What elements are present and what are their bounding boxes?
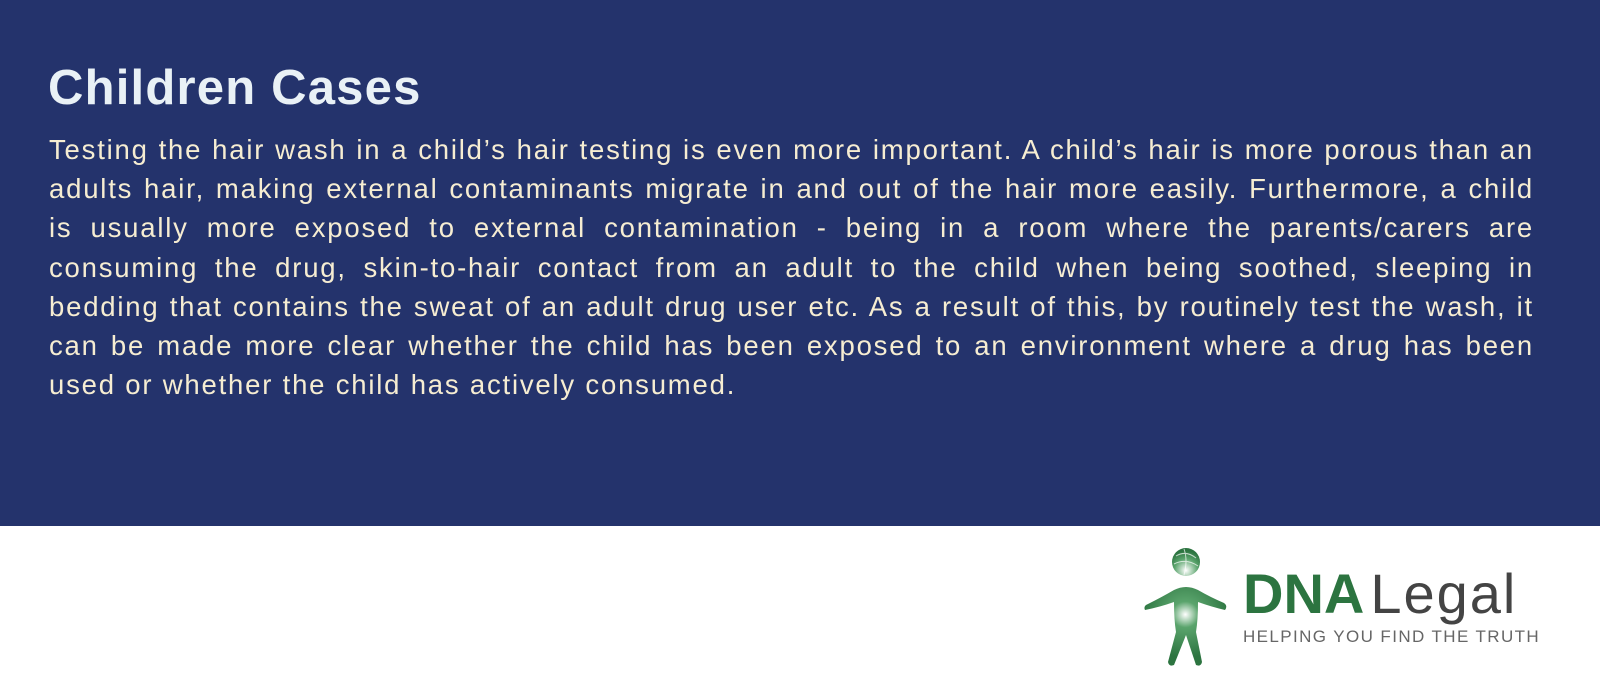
text block: body paragraph: adults hair, making external contaminants migrate in and out of the hair more easily. Furthermore, a child bbox=[49, 173, 1534, 204]
title: Children Cases bbox=[48, 61, 422, 115]
text block: body paragraph bbox=[49, 134, 1534, 400]
text block: body paragraph: bedding that contains the sweat of an adult drug user etc. As a result of this, by routinely test the wash, it bbox=[49, 291, 1534, 322]
text block: body paragraph: is usually more exposed to external contamination - being in a room where the parents/carers are bbox=[49, 212, 1534, 243]
logo text: DNA Legal: DNALegal bbox=[1243, 562, 1517, 625]
icon: green figure bbox=[1144, 548, 1226, 666]
text block: body paragraph: can be made more clear whether the child has been exposed to an environment where a drug has been bbox=[49, 330, 1534, 361]
text: tagline: HELPING YOU FIND THE TRUTH bbox=[1243, 627, 1540, 646]
text block: body paragraph: consuming the drug, skin-to-hair contact from an adult to the child when being soothed, sleeping in bbox=[49, 252, 1534, 283]
text block: body paragraph: Testing the hair wash in a child’s hair testing is even more important. A child’s hair is more porous than an bbox=[49, 134, 1534, 165]
panel: blue text panel bbox=[0, 0, 1600, 526]
text block: body paragraph: used or whether the child has actively consumed. bbox=[49, 369, 736, 400]
